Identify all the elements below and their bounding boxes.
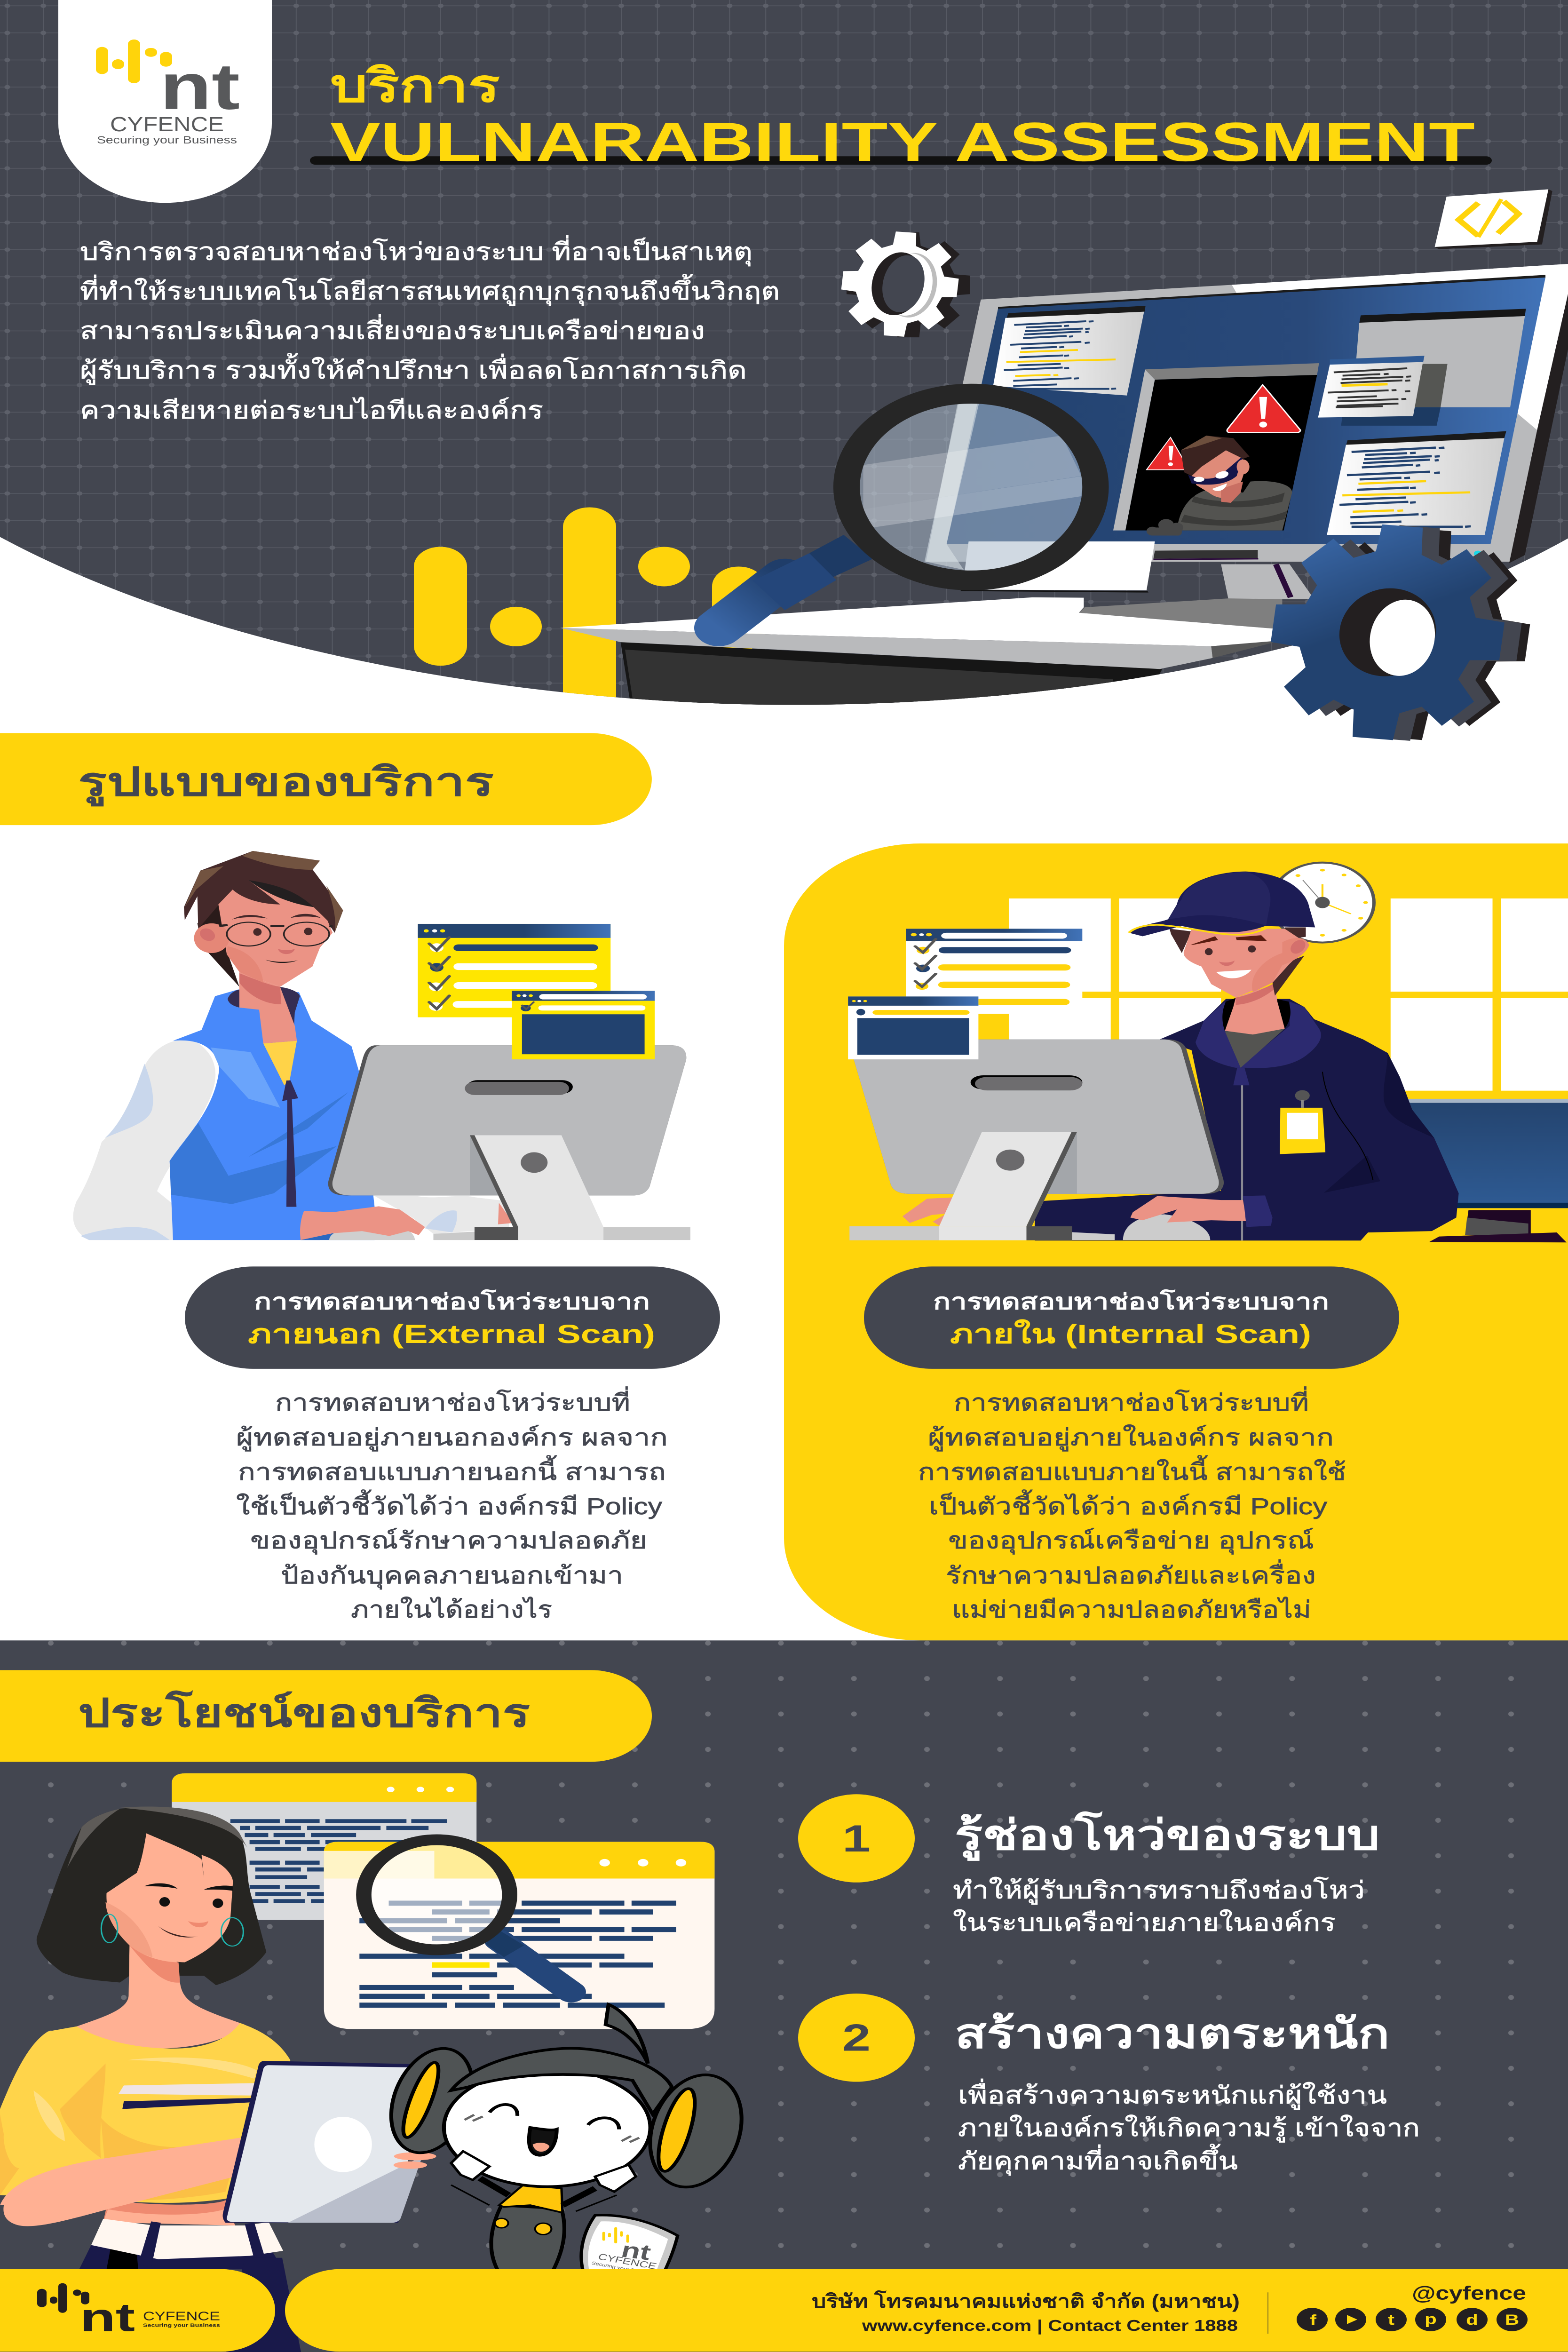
icon: white gear: [836, 228, 970, 340]
text block: internal scan description: การทดสอบแบบภายในนี้ สามารถใช้: [918, 1455, 1346, 1485]
benefit 1: รู้ช่องโหว่ของระบบ: [955, 1811, 1380, 1861]
footer: left logo pill: CYFENCE: [143, 2310, 220, 2323]
heading: service types: [0, 733, 652, 825]
social icons: p: [1425, 2311, 1437, 2328]
logo: NT Cyfence badge: Securing your Business: [97, 134, 237, 146]
magnifier lens: [847, 394, 1095, 580]
title block: [310, 61, 1492, 173]
logo: NT Cyfence badge: CYFENCE: [110, 113, 224, 135]
text block: external scan description: ป้องกันบุคคลภายนอกเข้ามา: [281, 1563, 623, 1589]
mascot shield with logo: [581, 2215, 678, 2274]
opening with thief: [1113, 363, 1319, 536]
logo: NT Cyfence badge: [58, 0, 272, 203]
desktop monitor at right: [1407, 1099, 1568, 1242]
text block: internal scan description: การทดสอบหาช่องโหว่ระบบที่: [954, 1386, 1309, 1415]
logo: NT Cyfence badge: nt: [160, 50, 240, 123]
footer: contact bar: www.cyfence.com | Contact Center 1888: [862, 2317, 1238, 2335]
text block: internal scan description: ผู้ทดสอบอยู่ภายในองค์กร ผลจาก: [928, 1424, 1334, 1451]
benefit 2: สร้างความตระหนัก: [955, 2011, 1390, 2057]
magnifier: [364, 1840, 571, 1992]
front code window: [324, 1842, 714, 2029]
benefit 1: ในระบบเครือข่ายภายในองค์กร: [953, 1909, 1336, 1936]
text block: external scan description: การทดสอบหาช่องโหว่ระบบที่: [275, 1386, 630, 1415]
footer: contact bar: บริษัท โทรคมนาคมแห่งชาติ จำกัด (มหาชน): [812, 2290, 1240, 2312]
computer back: [328, 1045, 690, 1240]
intro text block: [80, 235, 780, 423]
pill: internal scan title: [864, 1266, 1399, 1369]
text block: internal scan description: เป็นตัวชี้วัดได้ว่า องค์กรมี Policy: [929, 1489, 1328, 1519]
intro text block: ความเสียหายต่อระบบไอทีและองค์กร: [80, 397, 543, 423]
illustration: woman, code windows and mascot: [0, 1773, 753, 2274]
monitor frame: [925, 264, 1568, 563]
benefit 2: ภัยคุกคามที่อาจเกิดขึ้น: [958, 2144, 1238, 2176]
benefit 2: 2: [842, 2017, 871, 2059]
title block: บริการ: [330, 61, 500, 111]
text block: internal scan description: ของอุปกรณ์เครือข่าย อุปกรณ์: [948, 1527, 1314, 1555]
man body: [73, 972, 374, 1240]
man hand and mouse: [300, 1196, 513, 1240]
title block: VULNARABILITY ASSESSMENT: [330, 111, 1475, 173]
benefit 2: เพื่อสร้างความตระหนักแก่ผู้ใช้งาน: [958, 2079, 1387, 2110]
mascot shield with logo: Securing your Bus: [591, 2261, 642, 2274]
small window: [848, 996, 978, 1059]
text block: external scan description: ของอุปกรณ์รักษาความปลอดภัย: [250, 1527, 647, 1555]
social icons: d: [1466, 2311, 1478, 2328]
decorative yellow logo bars: [414, 507, 765, 697]
text block: external scan description: การทดสอบแบบภายนอกนี้ สามารถ: [238, 1455, 666, 1485]
benefit 2: ภายในองค์กรให้เกิดความรู้ เข้าใจจาก: [958, 2114, 1420, 2143]
benefit 1: 1: [842, 1818, 871, 1860]
pill: external scan title: ภายนอก (External Scan): [248, 1319, 655, 1349]
footer: contact bar: [285, 2269, 1568, 2352]
icon: warning triangle large: [1227, 385, 1300, 433]
panel: hero dark background with grid: [0, 0, 1568, 705]
woman: [0, 1807, 436, 2269]
wall clock: [1271, 863, 1374, 943]
intro text block: ผู้รับบริการ รวมทั้งให้คำปรึกษา เพื่อลดโอกาสการเกิด: [80, 353, 747, 385]
magnifier handle: [719, 535, 873, 628]
benefit 2: [798, 1994, 1420, 2176]
footer: left logo pill: [0, 2269, 275, 2352]
technician head with cap: [1129, 872, 1315, 998]
monitor stand: [1079, 564, 1314, 629]
text block: external scan description: ผู้ทดสอบอยู่ภายนอกองค์กร ผลจาก: [236, 1424, 668, 1451]
illustration: desk shading: [621, 642, 1162, 705]
ID badge: [1280, 1090, 1325, 1154]
grey window: [1341, 309, 1526, 426]
code window bottom right: [1327, 431, 1506, 535]
tablet: [223, 2061, 422, 2223]
illustration: external scan man at computer: [73, 851, 690, 1240]
icon: code card: [1435, 189, 1552, 249]
technician hands and mouse: [903, 1195, 1273, 1240]
pill: external scan title: การทดสอบหาช่องโหว่ระบบจาก: [254, 1289, 650, 1314]
mascot shield with logo: CYFENCE: [597, 2251, 658, 2271]
footer: contact bar: @cyfence: [1412, 2283, 1526, 2304]
illustration: hero scene with monitor, thief, magnifier and gears: [560, 189, 1568, 748]
checklist window: [418, 924, 610, 1017]
thief character: [1147, 436, 1292, 536]
social icons: t: [1388, 2311, 1394, 2328]
text block: external scan description: ภายในได้อย่างไร: [351, 1597, 552, 1623]
pill: internal scan title: ภายใน (Internal Scan): [950, 1319, 1311, 1349]
back code window: [172, 1773, 476, 1920]
heading: benefits: ประโยชน์ของบริการ: [78, 1690, 530, 1735]
panel: benefits dark background: [0, 1640, 1568, 2352]
intro text block: ที่ทำให้ระบบเทคโนโลยีสารสนเทศถูกบุกรุกจนถึงขึ้นวิกฤต: [80, 274, 780, 306]
intro text block: บริการตรวจสอบหาช่องโหว่ของระบบ ที่อาจเป็นสาเหตุ: [80, 235, 752, 266]
benefit 1: [798, 1794, 1380, 1936]
illustration: internal scan technician at computer: [848, 863, 1568, 1242]
text block: internal scan description: รักษาความปลอดภัยและเครื่อง: [946, 1559, 1316, 1589]
windows in room: [1009, 898, 1568, 1091]
checklist window: [906, 929, 1082, 1014]
benefit 1: ทำให้ผู้รับบริการทราบถึงช่องโหว่: [953, 1876, 1365, 1905]
text block: internal scan description: [918, 1386, 1346, 1623]
social icons: f: [1310, 2312, 1317, 2328]
intro text block: สามารถประเมินความเสี่ยงของระบบเครือข่ายของ: [80, 314, 705, 344]
social icons: B: [1505, 2311, 1519, 2328]
small code window: [1318, 356, 1425, 418]
small window: [512, 991, 655, 1059]
icon: warning triangle small: [1147, 437, 1189, 470]
pill: internal scan title: การทดสอบหาช่องโหว่ระบบจาก: [933, 1289, 1329, 1314]
text block: external scan description: ใช้เป็นตัวชี้วัดได้ว่า องค์กรมี Policy: [236, 1489, 663, 1519]
man head: [184, 851, 343, 987]
technician body: [1035, 984, 1459, 1240]
footer: left logo pill: Securing your Business: [143, 2322, 220, 2328]
dotted texture: [0, 1640, 1568, 2275]
paper sheet: [960, 541, 1155, 593]
mascot shield with logo: nt: [619, 2237, 654, 2265]
icon: blue gear: [1259, 517, 1542, 748]
desk top: [560, 597, 1282, 669]
heading: benefits: [0, 1670, 652, 1762]
text block: external scan description: [236, 1386, 668, 1623]
mascot: [379, 2004, 753, 2273]
panel: internal scan background: [784, 843, 1568, 1640]
footer: left logo pill: nt: [80, 2295, 135, 2340]
code window top left: [993, 306, 1146, 396]
woman's trousers below footer line: [226, 2258, 301, 2352]
computer back: [849, 1040, 1224, 1240]
pill: external scan title: [185, 1266, 720, 1369]
social icons: [1297, 2308, 1528, 2331]
text block: internal scan description: แม่ข่ายมีความปลอดภัยหรือไม่: [952, 1597, 1311, 1623]
heading: service types: รูปแบบของบริการ: [78, 760, 494, 807]
